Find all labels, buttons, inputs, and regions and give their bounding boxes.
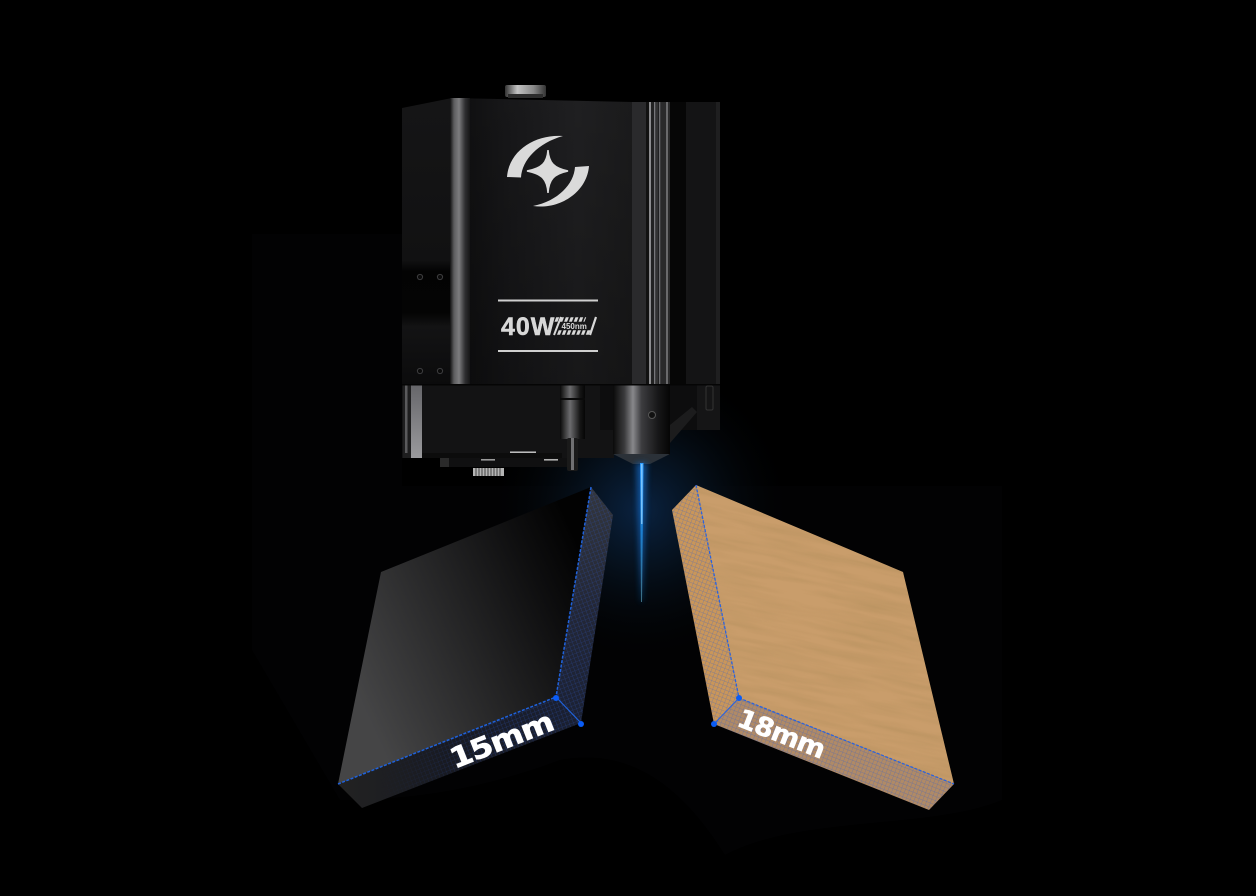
- top knob: [505, 85, 546, 98]
- laser module: [402, 85, 720, 476]
- logo: [507, 136, 589, 207]
- black dots: [553, 695, 584, 727]
- thumb screw: [473, 468, 504, 476]
- spec badge: 450nm: [562, 322, 587, 331]
- label: 15mm: 15mm: [445, 706, 558, 776]
- infographic scene: [338, 85, 954, 810]
- front edge highlight: [450, 98, 470, 385]
- wood dashed edges: [696, 485, 954, 784]
- front face: [452, 98, 632, 385]
- wood top face: [696, 485, 954, 784]
- black side face: [556, 487, 613, 723]
- side face: [402, 98, 452, 385]
- black acrylic block: [338, 487, 613, 808]
- nozzle: [613, 385, 670, 464]
- spec badge: 40W: [501, 313, 555, 341]
- background glow: [252, 234, 1002, 855]
- guide pin: [560, 385, 585, 471]
- spec badge: [498, 300, 598, 352]
- right lower housing: [600, 385, 720, 430]
- side screws: [417, 274, 443, 374]
- black dashed edges: [338, 487, 591, 784]
- label: 18mm: 18mm: [733, 703, 829, 765]
- hatch marks: [554, 317, 596, 335]
- laser beam: [636, 463, 647, 602]
- wood block: [672, 484, 954, 810]
- wood dots: [711, 695, 742, 727]
- air nozzle fitting: [670, 407, 697, 443]
- lower housing: [402, 385, 614, 467]
- black top face: [338, 487, 591, 784]
- heat sink side: [632, 102, 720, 385]
- wood left face: [672, 485, 739, 724]
- wood front face: [714, 698, 954, 810]
- black front face: [338, 697, 581, 808]
